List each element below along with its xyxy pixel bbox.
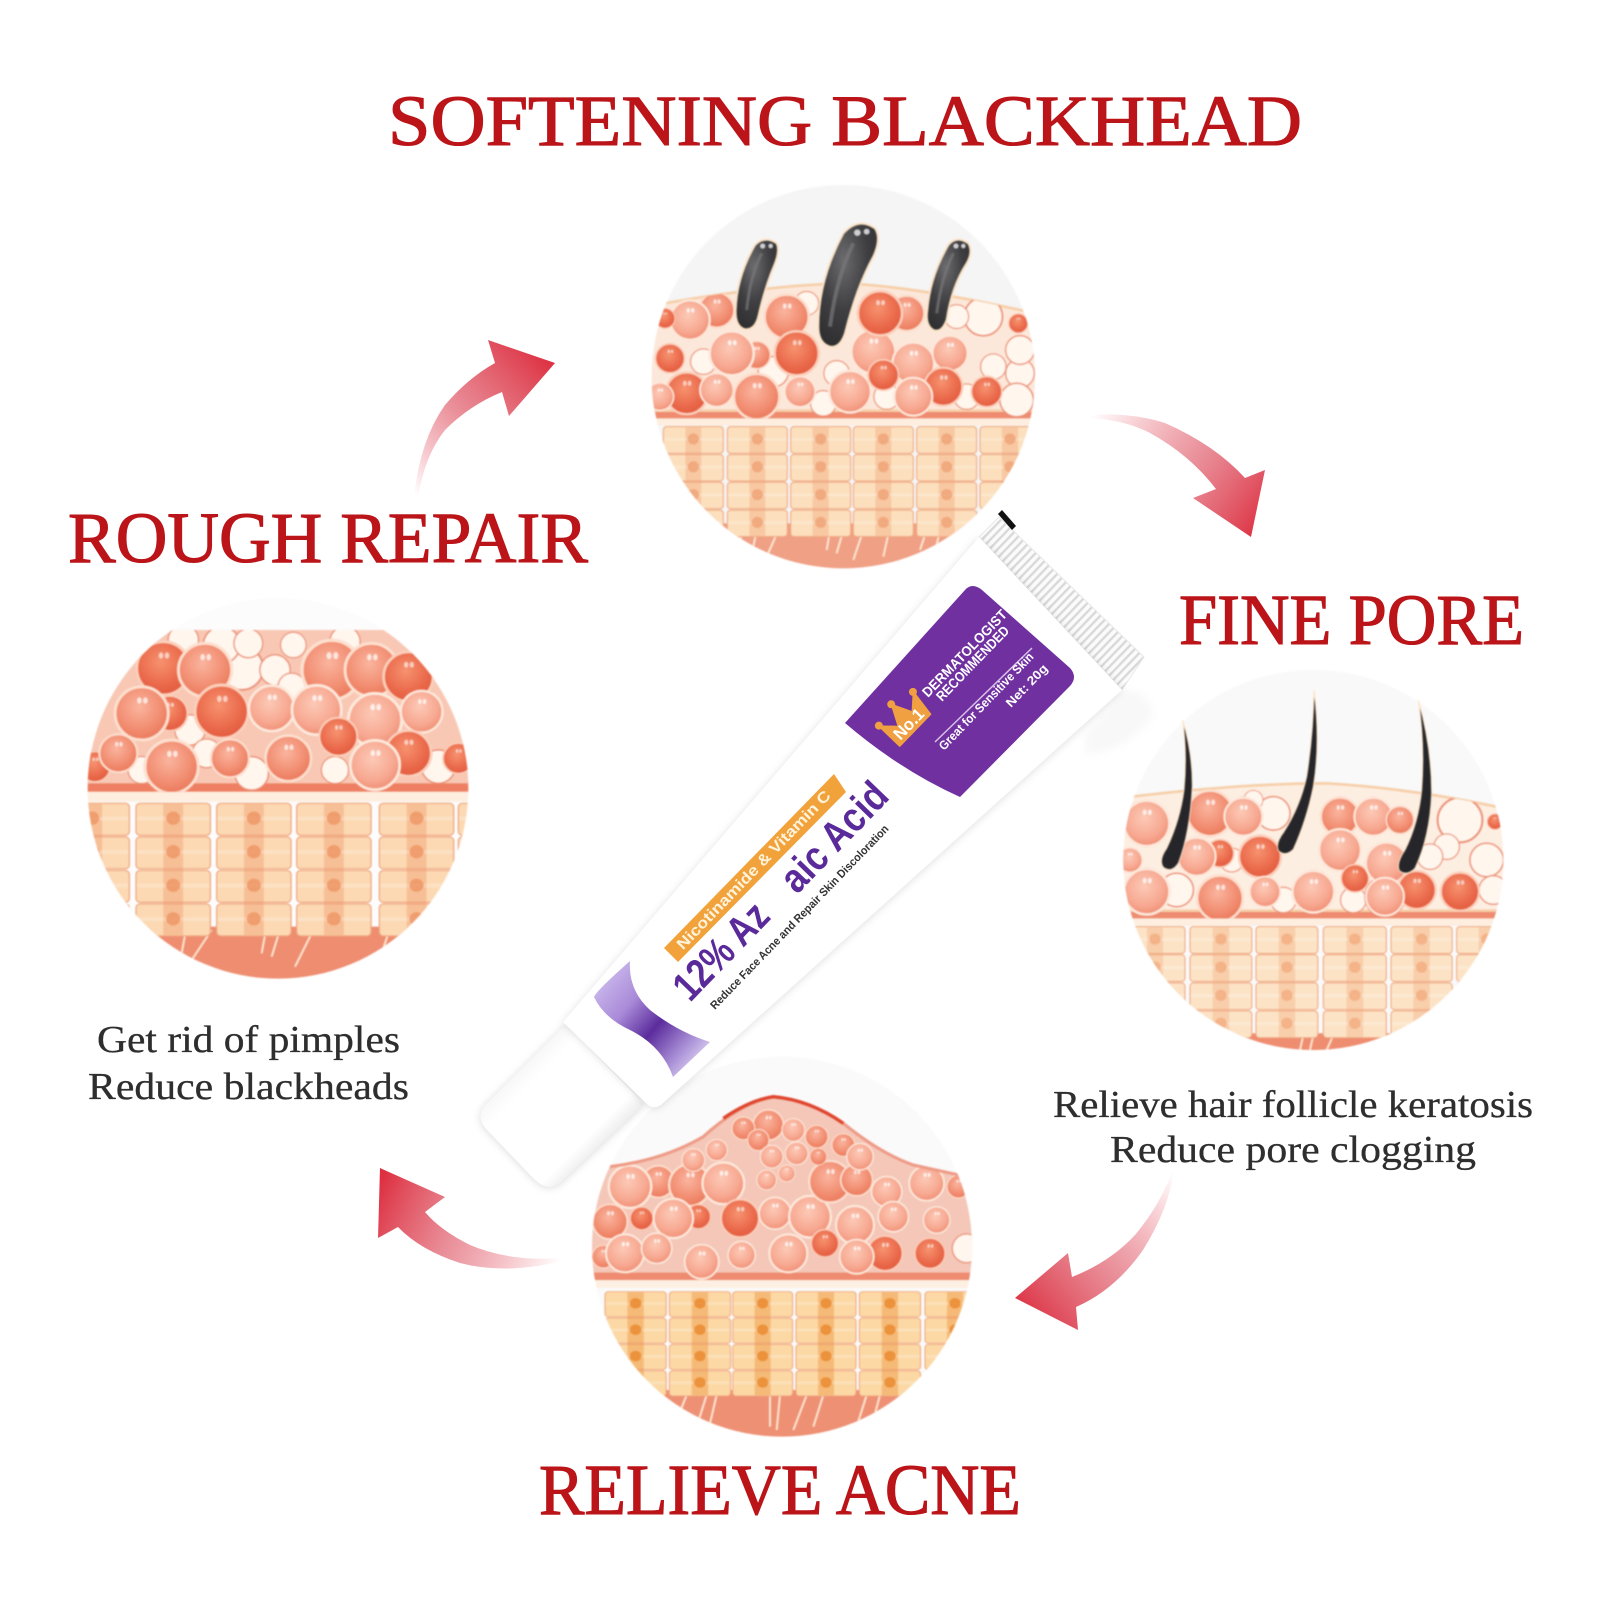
dermis layer [664,1389,900,1438]
text block: fine pore description: Relieve hair follicle keratosis [1053,1084,1533,1126]
label headline: DERMATOLOGIST [919,606,1010,700]
dermis layer [1248,1032,1391,1051]
epidermis [1110,783,1510,911]
hair: right [1398,700,1432,873]
basal bands [580,1272,980,1280]
cell block columns [1125,927,1517,1038]
epidermis with pimple bump [580,1097,980,1273]
label details: Great for Sensitive Skin [936,650,1036,753]
text block: rough repair description [88,1019,409,1108]
title: softening blackhead: SOFTENING BLACKHEAD [388,81,1302,161]
product tube [480,510,1144,1187]
text block: fine pore description [1053,1084,1533,1171]
epidermis cells [79,625,474,795]
product name part one: 12% Az [663,892,778,1009]
fibers [740,536,940,561]
tube body [563,537,1122,1107]
hair: left [1161,720,1192,870]
crown icon [869,681,936,749]
title: fine pore: FINE PORE [1179,580,1524,660]
basal bands [654,411,1032,420]
blackhead: center [818,224,878,347]
arrow: softening blackhead to fine pore [1090,414,1265,537]
inflamed skin line over bump [610,1097,967,1177]
red pimple highlight [723,1097,843,1123]
basal bands [75,782,475,792]
epidermis cells [1117,789,1508,922]
epidermis [75,630,475,783]
purple swoosh [594,961,710,1077]
fibers [677,1395,880,1430]
fibers [1298,1038,1334,1050]
hair: center [1277,690,1317,854]
pale circle background [652,185,1035,568]
panel: fine pore skin illustration [1122,689,1504,1051]
tube crimp [979,517,1144,690]
pale circle background [88,598,468,979]
blackhead: right [927,240,970,331]
epidermis cells [646,290,1034,421]
title: rough repair: ROUGH REPAIR [68,498,588,578]
banner text: Nicotinamide & Vitamin C [674,788,835,953]
arrow: fine pore to relieve acne [1015,1172,1174,1330]
tube cap [480,1024,644,1187]
arrow: rough repair to softening blackhead [414,340,555,497]
text block: rough repair description: Get rid of pimples [97,1019,400,1061]
black crimp mark [998,510,1016,530]
pale halo near crimp [1085,690,1153,755]
product name part two: aic Acid [770,772,897,901]
epidermis [640,283,1060,411]
pale circle background [592,1057,972,1437]
text block: rough repair description: Reduce blackheads [88,1066,409,1108]
cell block columns [88,802,468,938]
blackhead: left [736,240,778,329]
label headline: RECOMMENDED [933,622,1012,704]
fibers [180,929,389,968]
cell block columns [663,427,1040,537]
crown text: No.1 [890,705,928,744]
arrow: relieve acne to rough repair [378,1168,562,1269]
product tagline: Reduce Face Acne and Repair Skin Discoloration [709,823,892,1012]
basal bands [1130,911,1497,920]
purple label [845,586,1074,797]
label details: Net: 20g [1003,662,1051,710]
title: relieve acne: RELIEVE ACNE [539,1450,1021,1530]
panel: relieve acne skin illustration [591,1094,972,1438]
dermis layer [158,926,398,980]
label divider [935,648,1032,742]
pale circle background [1123,670,1503,1050]
cell block columns [605,1292,985,1396]
panel: softening blackhead skin illustration [651,186,1036,570]
text block: fine pore description: Reduce pore clogging [1110,1129,1476,1171]
dermis layer [722,522,948,570]
epidermis cells [591,1109,981,1280]
orange banner [664,774,846,962]
panel: rough repair skin illustration [86,629,470,980]
